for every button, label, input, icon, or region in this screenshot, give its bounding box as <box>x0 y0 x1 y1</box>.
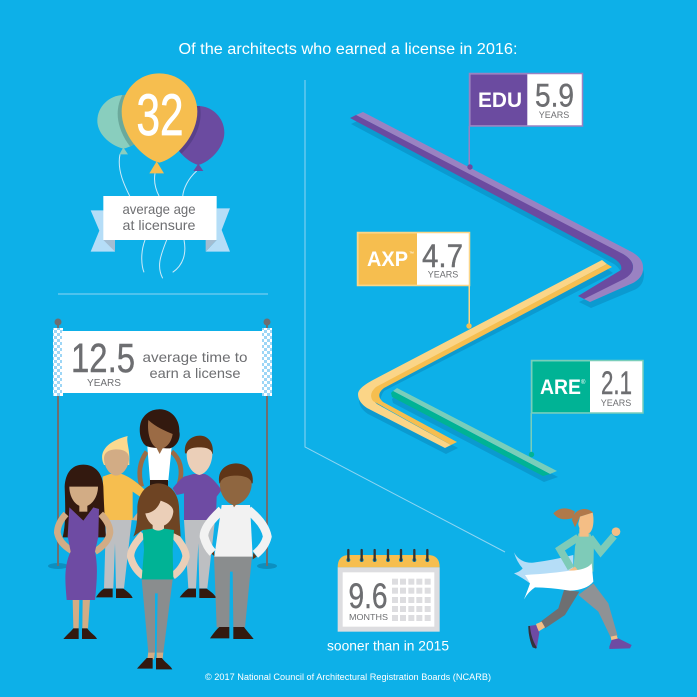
flag: AXP 4.7 years: ™ <box>409 251 414 257</box>
person: woman in teal <box>131 483 186 669</box>
flag: ARE 2.1 years: YEARS <box>601 398 631 408</box>
balloon illustration <box>91 73 230 278</box>
track: ARE green <box>391 388 558 482</box>
finish banner poles <box>48 318 277 569</box>
caption: average age at licensure: average age <box>122 201 196 217</box>
caption: average age at licensure <box>122 201 196 233</box>
finish banner: YEARS <box>87 378 121 389</box>
number 32: 32 <box>136 83 184 148</box>
title: Of the architects who earned a license in 2016: <box>178 41 518 58</box>
flag: ARE 2.1 years: 2.1 <box>601 365 632 401</box>
finish banner: earn a license <box>150 365 241 381</box>
icon: calendar <box>338 550 440 632</box>
flag: EDU 5.9 years: YEARS <box>539 110 569 120</box>
person: woman with purple dress <box>57 465 110 639</box>
caption: sooner than in 2015: sooner than in 2015 <box>327 638 449 654</box>
illustration: runner crossing finish line <box>514 508 632 649</box>
number: 9.6 months: MONTHS <box>349 612 388 622</box>
panel: average age balloons <box>91 73 230 278</box>
flag: AXP 4.7 years: YEARS <box>428 270 458 280</box>
track: EDU purple <box>350 112 644 308</box>
track: AXP yellow <box>358 260 613 454</box>
person: man in purple <box>173 436 222 598</box>
flag: ARE 2.1 years: ® <box>581 379 586 386</box>
flag: ARE 2.1 years <box>529 360 643 457</box>
group of people <box>57 409 267 669</box>
flag: AXP 4.7 years: 4.7 <box>422 238 463 274</box>
person: blond man <box>96 436 145 598</box>
flag: AXP 4.7 years <box>358 232 472 329</box>
flag: EDU 5.9 years: 5.9 <box>535 78 574 114</box>
panel: calendar 9.6 months <box>327 550 449 654</box>
panel: timeline tracks <box>350 74 644 482</box>
flag: EDU 5.9 years <box>467 74 582 170</box>
person: back woman <box>140 409 181 488</box>
flag: ARE 2.1 years: ARE <box>540 376 581 399</box>
finish banner <box>53 328 272 396</box>
footer: copyright: © 2017 National Council of Architectural Registration Boards (NCARB) <box>205 672 491 682</box>
number: 9.6 months: 9.6 <box>348 577 388 616</box>
finish banner: average time to <box>142 349 248 365</box>
caption: average age at licensure: at licensure <box>122 217 196 233</box>
flag: EDU 5.9 years: EDU <box>478 89 522 112</box>
person: man in white shirt <box>204 463 267 639</box>
flag: AXP 4.7 years: AXP <box>367 248 408 271</box>
panel: time to license banner and people <box>48 318 277 669</box>
finish banner: 12.5 <box>71 335 135 381</box>
